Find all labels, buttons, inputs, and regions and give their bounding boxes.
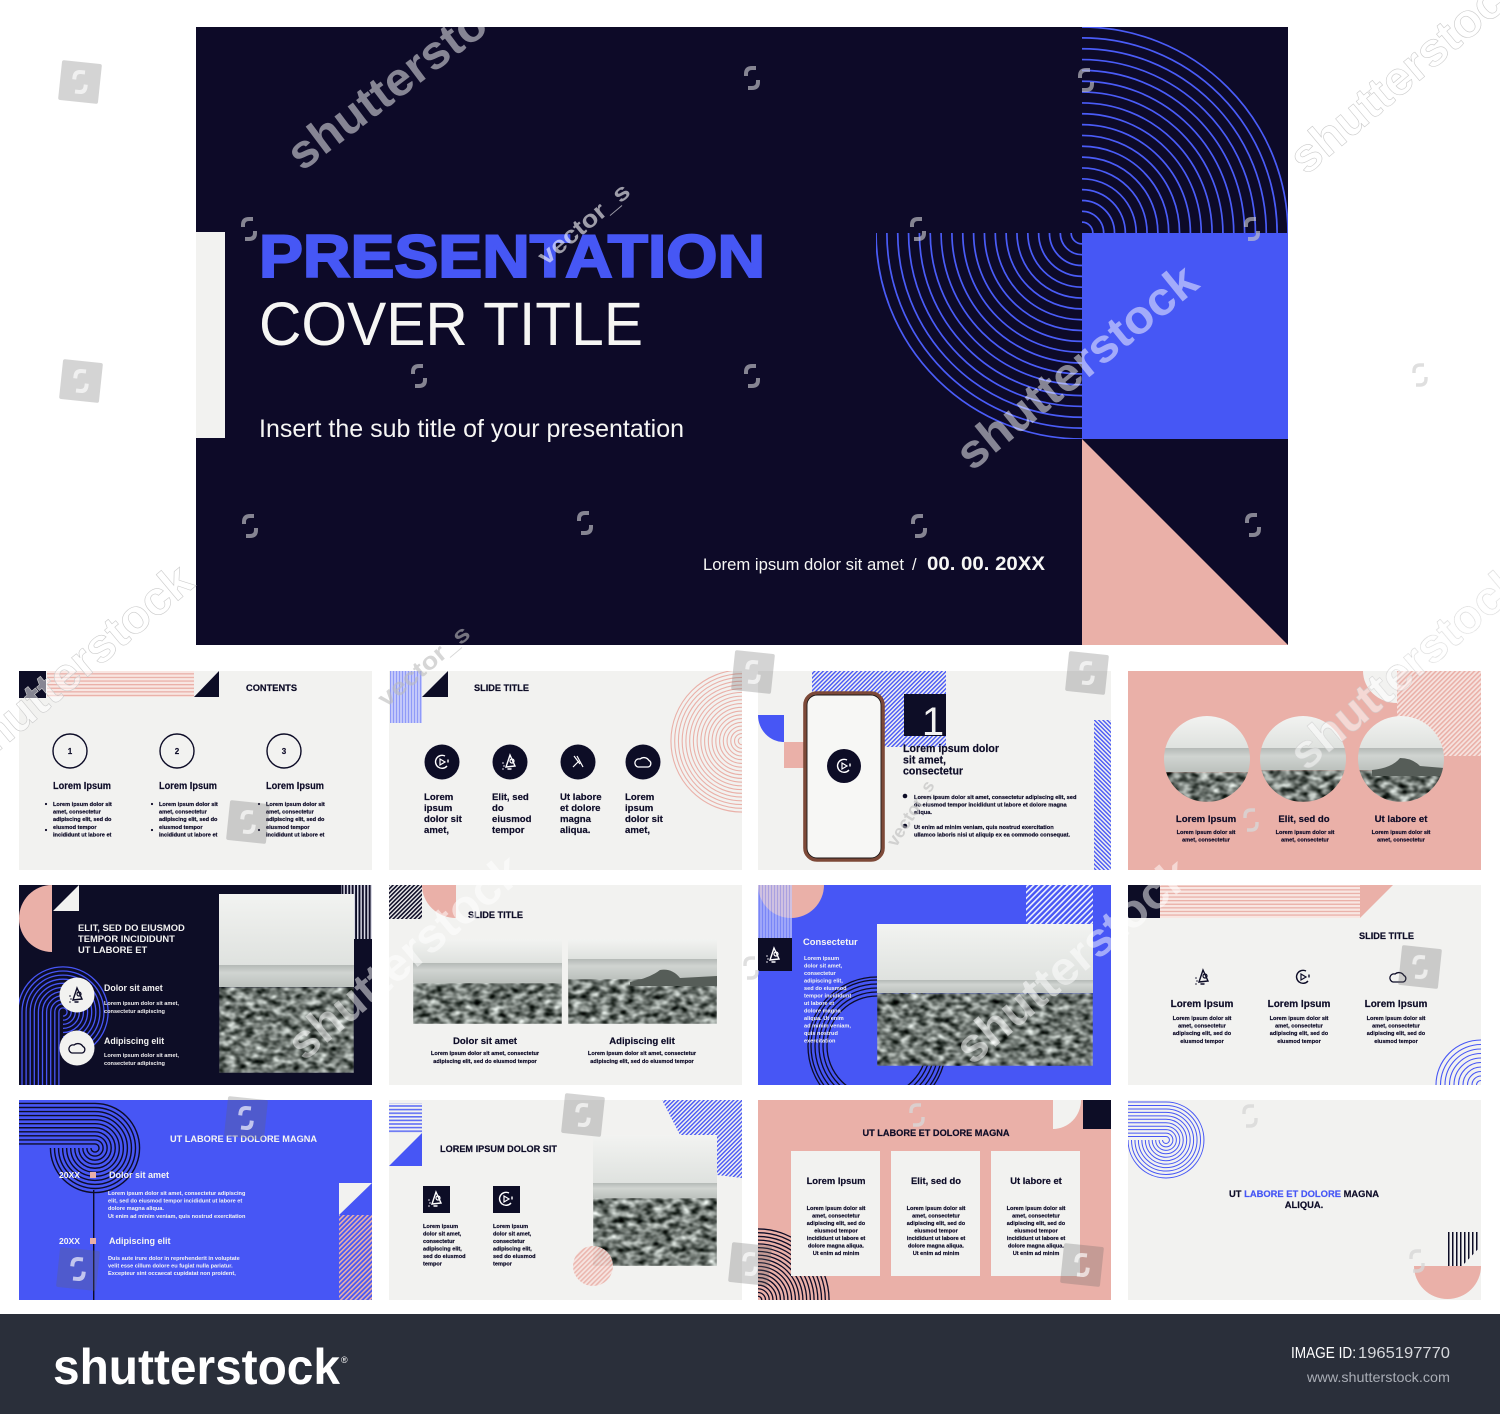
photo left	[413, 939, 562, 1024]
phone slide heading: consectetur	[903, 766, 963, 778]
milestone 1: 20XX	[59, 1170, 80, 1180]
column 2: adipiscing elit, sed do	[1270, 1031, 1329, 1037]
heading: UT LABORE ET DOLORE MAGNA	[862, 1128, 1010, 1138]
image id: IMAGE ID:1965197770	[1291, 1345, 1450, 1362]
blue horizontal stripes	[389, 1103, 422, 1133]
cover footer slash: /	[912, 556, 917, 574]
column text 2: dolor sit amet,	[493, 1232, 532, 1238]
icon column 2: tempor	[492, 825, 525, 836]
body: dolore magna	[804, 1008, 842, 1014]
number square	[904, 694, 946, 744]
item 2: amet, consectetur	[159, 810, 208, 816]
item 1: adipiscing elit, sed do	[53, 817, 112, 823]
panel: phone slide	[758, 671, 1111, 870]
body: ut labore et	[804, 1001, 834, 1007]
icon column 2: eiusmod	[492, 814, 532, 825]
item text: Lorem ipsum dolor sit amet,	[104, 1001, 179, 1007]
white triangle	[53, 885, 79, 911]
milestone 2: Duis aute irure dolor in reprehenderit in voluptate	[108, 1256, 240, 1262]
card 3	[991, 1151, 1080, 1276]
item text: consectetur adipiscing	[104, 1009, 166, 1015]
icon column 1: ipsum	[424, 803, 452, 814]
contents decoration	[19, 671, 219, 698]
blue square	[1082, 233, 1288, 439]
photo circle 2	[1260, 716, 1346, 802]
pink stripes	[339, 1215, 372, 1300]
column 3: adipiscing elit, sed do	[1367, 1031, 1426, 1037]
dark square 2	[493, 1186, 520, 1213]
item 1	[45, 734, 112, 838]
item 2: incididunt ut labore et	[159, 832, 218, 838]
captions: Lorem ipsum dolor sit	[1372, 830, 1431, 836]
item 2: Lorem Ipsum	[159, 781, 217, 792]
body: sed do eiusmod	[804, 986, 847, 992]
heading: LOREM IPSUM DOLOR SIT	[440, 1144, 557, 1154]
heading: UT LABORE ET DOLORE MAGNA	[170, 1133, 317, 1144]
panel: dark photo slide	[19, 885, 372, 1085]
caption left: adipiscing elit, sed do eiusmod tempor	[433, 1059, 538, 1065]
captions: Lorem Ipsum	[1176, 814, 1236, 825]
card 1	[791, 1151, 880, 1276]
item text	[104, 983, 179, 1067]
item 2: Lorem ipsum dolor sit	[159, 802, 218, 808]
icon column 2: do	[492, 803, 504, 814]
footer logo: shutterstock	[53, 1339, 340, 1395]
blue spiral	[1062, 1102, 1204, 1178]
column text 2: sed do eiusmod	[493, 1254, 536, 1260]
item 3: amet, consectetur	[266, 810, 315, 816]
column 1: adipiscing elit, sed do	[1173, 1031, 1232, 1037]
closing text: UT LABORE ET DOLORE MAGNA	[1229, 1188, 1379, 1199]
white triangle	[339, 1183, 372, 1215]
heading: ELIT, SED DO EIUSMOD	[78, 922, 185, 933]
photo circle 3	[1358, 716, 1444, 802]
icon column 2: Elit, sed	[492, 792, 529, 803]
card 2: Elit, sed do	[911, 1175, 961, 1186]
pink quarter	[422, 885, 456, 918]
milestone 2	[59, 1236, 240, 1277]
body: exercitation	[804, 1038, 836, 1044]
corner striped shape	[1363, 671, 1481, 756]
item text: Adipiscing elit	[104, 1036, 164, 1046]
panel: closing slide	[1128, 1100, 1481, 1300]
blue arcs	[1436, 1040, 1500, 1130]
cover footer date: 00. 00. 20XX	[927, 554, 1045, 575]
heading: UT LABORE ET	[78, 944, 148, 955]
column 1: eiusmod tempor	[1180, 1039, 1225, 1045]
milestone 1: Lorem ipsum dolor sit amet, consectetur adipiscing	[108, 1191, 246, 1197]
panel: photo and squares slide	[389, 1100, 742, 1300]
photo right	[568, 939, 717, 1024]
lavender stripes	[758, 885, 792, 939]
item 3: eiusmod tempor	[266, 825, 310, 831]
watermark: faint hooks	[745, 365, 1426, 1271]
item 3: Lorem Ipsum	[266, 781, 324, 792]
heading: Consectetur	[803, 936, 858, 947]
column text 2: Lorem ipsum	[493, 1224, 528, 1230]
card 1: Lorem Ipsum	[807, 1175, 865, 1186]
panel: blue photo slide	[758, 885, 1111, 1085]
icon column 1: amet,	[424, 825, 449, 836]
column 3: Lorem ipsum dolor sit	[1367, 1016, 1426, 1022]
top striped block	[812, 671, 946, 747]
contents heading: CONTENTS	[246, 683, 297, 693]
body: tempor incididunt	[804, 994, 851, 1000]
card 1: eiusmod tempor	[814, 1228, 859, 1234]
column text 1: consectetur	[423, 1239, 456, 1245]
column text 2: consectetur	[493, 1239, 526, 1245]
dark arcs	[687, 1229, 829, 1371]
card 2: eiusmod tempor	[914, 1228, 959, 1234]
column 1: Lorem Ipsum	[1171, 999, 1233, 1010]
icon column 3: et dolore	[560, 803, 601, 814]
item text: Dolor sit amet	[104, 983, 163, 993]
pink striped circle	[573, 1246, 613, 1286]
slide decoration	[1128, 885, 1393, 918]
card 2: adipiscing elit, sed do	[907, 1221, 966, 1227]
card 2: amet, consectetur	[912, 1214, 961, 1220]
panel: three circles slide	[1128, 671, 1481, 870]
closing text: ALIQUA.	[1285, 1199, 1323, 1210]
body: quis nostrud	[804, 1031, 838, 1037]
watermark: hook marks on cover	[243, 68, 1259, 536]
column text 2: adipiscing elit,	[493, 1246, 532, 1252]
body: adipiscing elit,	[804, 978, 843, 984]
column 1: Lorem ipsum dolor sit	[1173, 1016, 1232, 1022]
item 1: incididunt ut labore et	[53, 832, 112, 838]
watermark: shutterstock text on cover	[0, 0, 1500, 1074]
body: dolor sit amet,	[804, 964, 843, 970]
column text 1: dolor sit amet,	[423, 1232, 462, 1238]
column 2: eiusmod tempor	[1277, 1039, 1322, 1045]
concentric arcs top right	[1082, 27, 1288, 233]
card 3: Lorem ipsum dolor sit	[1007, 1206, 1066, 1212]
column 3	[1365, 973, 1427, 1045]
icon column 2	[492, 744, 532, 836]
column 2	[1268, 970, 1330, 1045]
column text 1: Lorem ipsum	[423, 1224, 458, 1230]
card 1: amet, consectetur	[812, 1214, 861, 1220]
item 1: Lorem Ipsum	[53, 781, 111, 792]
card 3: amet, consectetur	[1012, 1214, 1061, 1220]
milestone 2: velit esse cillum dolore eu fugiat nulla pariatur.	[108, 1264, 233, 1270]
captions: Lorem ipsum dolor sit	[1276, 830, 1335, 836]
body: ad minim veniam,	[804, 1024, 851, 1030]
heading: TEMPOR INCIDIDUNT	[78, 933, 175, 944]
thumbnail slides group	[19, 671, 1481, 1300]
column 2: Lorem Ipsum	[1268, 999, 1330, 1010]
body: consectetur	[804, 971, 837, 977]
timeline line	[93, 1190, 94, 1300]
phone slide bullets: Lorem ipsum dolor sit amet, consectetur adipiscing elit, sed	[914, 795, 1077, 801]
icon column 1: dolor sit	[424, 814, 463, 825]
cover title white: COVER TITLE	[259, 290, 643, 358]
icon bell	[60, 978, 94, 1012]
milestone 1: Dolor sit amet	[109, 1170, 169, 1180]
slide title: SLIDE TITLE	[474, 683, 529, 693]
icon column 1	[424, 744, 463, 836]
captions: Elit, sed do	[1278, 814, 1330, 825]
item 1: Lorem ipsum dolor sit	[53, 802, 112, 808]
blue quarter shape	[758, 715, 784, 742]
photo circle 1	[1164, 716, 1250, 802]
right striped block	[1094, 720, 1111, 870]
captions: amet, consectetur	[1377, 838, 1426, 844]
footer url: www.shutterstock.com	[1306, 1369, 1450, 1385]
item 3	[258, 734, 325, 838]
item 1: 1	[68, 747, 73, 756]
panel: three cards slide	[758, 1100, 1111, 1300]
item text: consectetur adipiscing	[104, 1061, 166, 1067]
pink rectangle	[784, 742, 808, 768]
cover footer text: Lorem ipsum dolor sit amet	[703, 556, 904, 574]
panel: three icons slide	[1128, 885, 1481, 1085]
phone slide bullets: ullamco laboris nisi ut aliquip ex ea commodo consequat.	[914, 832, 1071, 838]
item 3: Lorem ipsum dolor sit	[266, 802, 325, 808]
photo	[877, 924, 1093, 1066]
watermark: vector_s text: vector_s	[882, 777, 939, 850]
phone slide bullets	[903, 794, 1077, 838]
column 1: amet, consectetur	[1178, 1024, 1227, 1030]
column 2: Lorem ipsum dolor sit	[1270, 1016, 1329, 1022]
card 3: dolore magna aliqua.	[1008, 1244, 1064, 1250]
card 3: eiusmod tempor	[1014, 1228, 1059, 1234]
milestone 2: 20XX	[59, 1236, 80, 1246]
column text 1: sed do eiusmod	[423, 1254, 466, 1260]
watermark: vector_s text	[373, 178, 939, 850]
card 2: Lorem ipsum dolor sit	[907, 1206, 966, 1212]
card 3: incididunt ut labore et	[1007, 1236, 1065, 1242]
panel: timeline slide	[19, 1100, 372, 1300]
item 1: amet, consectetur	[53, 810, 102, 816]
white quarter	[1053, 1100, 1081, 1129]
icon column 1: Lorem	[424, 792, 453, 803]
body: Lorem ipsum	[804, 956, 839, 962]
dark spiral	[0, 1103, 140, 1193]
card 2	[891, 1151, 980, 1276]
column 1	[1171, 970, 1233, 1045]
caption right: Adipiscing elit	[609, 1036, 676, 1047]
milestone 1: dolore magna aliqua.	[108, 1206, 164, 1212]
body: aliqua. Ut enim	[804, 1016, 844, 1022]
blue spiral	[18, 967, 108, 1135]
pink concentric arcs	[671, 670, 813, 812]
watermark: vector_s text: vector_s	[373, 620, 476, 713]
dark square	[1083, 1100, 1111, 1129]
pink half circle	[19, 885, 52, 952]
card 2: dolore magna aliqua.	[908, 1244, 964, 1250]
column 2: amet, consectetur	[1275, 1024, 1324, 1030]
phone slide bullets: aliqua.	[914, 810, 932, 816]
icon cloud	[60, 1030, 94, 1066]
caption right: Lorem ipsum dolor sit amet, consectetur	[588, 1051, 697, 1057]
watermark: shutterstock text on cover: shutterstock	[944, 846, 1201, 1074]
column text 1: tempor	[423, 1262, 443, 1268]
phone slide heading: sit amet,	[903, 754, 946, 766]
slide title: SLIDE TITLE	[468, 910, 523, 920]
phone slide bullets: Ut enim ad minim veniam, quis nostrud exercitation	[914, 825, 1054, 831]
caption left	[431, 1036, 540, 1065]
milestone 1	[59, 1170, 246, 1220]
card 2: Ut enim ad minim	[913, 1251, 959, 1257]
column 3: eiusmod tempor	[1374, 1039, 1419, 1045]
panel: two photos slide	[389, 885, 742, 1085]
caption left: Lorem ipsum dolor sit amet, consectetur	[431, 1051, 540, 1057]
card 1: incididunt ut labore et	[807, 1236, 865, 1242]
caption right: adipiscing elit, sed do eiusmod tempor	[590, 1059, 695, 1065]
caption right	[588, 1036, 697, 1065]
icon column 3: Ut labore	[560, 792, 602, 803]
icon column 3: aliqua.	[560, 825, 590, 836]
card 3: Ut labore et	[1010, 1175, 1062, 1186]
captions: amet, consectetur	[1281, 838, 1330, 844]
item 1: eiusmod tempor	[53, 825, 97, 831]
column 3: amet, consectetur	[1372, 1024, 1421, 1030]
panel: icon slide	[389, 671, 742, 870]
panel: cover slide	[196, 27, 1288, 645]
pink triangle	[1082, 439, 1288, 645]
captions: amet, consectetur	[1182, 838, 1231, 844]
card 1: dolore magna aliqua.	[808, 1244, 864, 1250]
phone slide bullets: do eiusmod tempor incididunt ut labore et dolore magna	[914, 802, 1067, 808]
item 2	[151, 734, 218, 838]
milestone 2: Excepteur sint occaecat cupidatat non proident,	[108, 1271, 236, 1277]
cover background	[196, 27, 1288, 645]
blue triangle	[389, 1133, 422, 1166]
column text 2: tempor	[493, 1262, 513, 1268]
item 3: 3	[282, 747, 287, 756]
milestone 1: elit, sed do eiusmod tempor incididunt ut labore et	[108, 1199, 242, 1205]
pink ellipse	[758, 885, 824, 918]
photo	[219, 894, 354, 1073]
card 1: Lorem ipsum dolor sit	[807, 1206, 866, 1212]
striped corner	[662, 1100, 742, 1178]
slide decoration	[390, 671, 448, 723]
footer registered mark: ®	[341, 1355, 348, 1365]
white accent strip	[196, 232, 225, 438]
captions: Lorem ipsum dolor sit	[1177, 830, 1236, 836]
captions: Ut labore et	[1375, 814, 1428, 825]
icon column 4: amet,	[625, 825, 650, 836]
cover title blue: PRESENTATION	[259, 223, 765, 290]
slide title: SLIDE TITLE	[1359, 931, 1414, 941]
phone slide heading: Lorem ipsum dolor	[903, 743, 999, 755]
pink half circle	[1414, 1266, 1481, 1299]
cover subtitle: Insert the sub title of your presentation	[259, 415, 684, 443]
item 2: 2	[175, 747, 180, 756]
footer bar	[0, 1314, 1500, 1414]
icon column 4: dolor sit	[625, 814, 664, 825]
card 1: Ut enim ad minim	[813, 1251, 859, 1257]
column text 1: adipiscing elit,	[423, 1246, 462, 1252]
dark arcs	[808, 977, 946, 1115]
card 3: adipiscing elit, sed do	[1007, 1221, 1066, 1227]
card 3: Ut enim ad minim	[1013, 1251, 1059, 1257]
photo	[593, 1135, 717, 1266]
milestone 2: Adipiscing elit	[109, 1236, 171, 1246]
icon column 3	[560, 744, 602, 836]
white stripes	[1026, 885, 1093, 925]
dark vertical stripes	[1448, 1232, 1479, 1266]
item text: Lorem ipsum dolor sit amet,	[104, 1053, 179, 1059]
watermark: vector_s text: vector_s	[533, 178, 636, 271]
card 1: adipiscing elit, sed do	[807, 1221, 866, 1227]
item 3: adipiscing elit, sed do	[266, 817, 325, 823]
icon column 3: magna	[560, 814, 592, 825]
dark square 1	[423, 1186, 450, 1213]
captions	[1176, 814, 1431, 844]
milestone 1: Ut enim ad minim veniam, quis nostrud exercitation	[108, 1214, 246, 1220]
grey stripes	[341, 885, 372, 939]
icon column 4: Lorem	[625, 792, 654, 803]
number square: 1	[922, 700, 944, 744]
dark square icon	[758, 938, 792, 971]
hatched block	[389, 885, 422, 919]
icon column 4: ipsum	[625, 803, 653, 814]
icon column 4	[625, 744, 664, 836]
watermark: shutterstock text on cover: shutterstock	[276, 842, 533, 1070]
card 2: incididunt ut labore et	[907, 1236, 965, 1242]
item 3: incididunt ut labore et	[266, 832, 325, 838]
panel: contents slide	[19, 671, 372, 870]
phone mockup	[805, 693, 883, 860]
item 2: eiusmod tempor	[159, 825, 203, 831]
concentric arcs lower left	[876, 233, 1082, 439]
watermark: shutterstock text on cover: shutterstock	[945, 252, 1208, 480]
item 2: adipiscing elit, sed do	[159, 817, 218, 823]
column 3: Lorem Ipsum	[1365, 999, 1427, 1010]
caption left: Dolor sit amet	[453, 1036, 518, 1047]
